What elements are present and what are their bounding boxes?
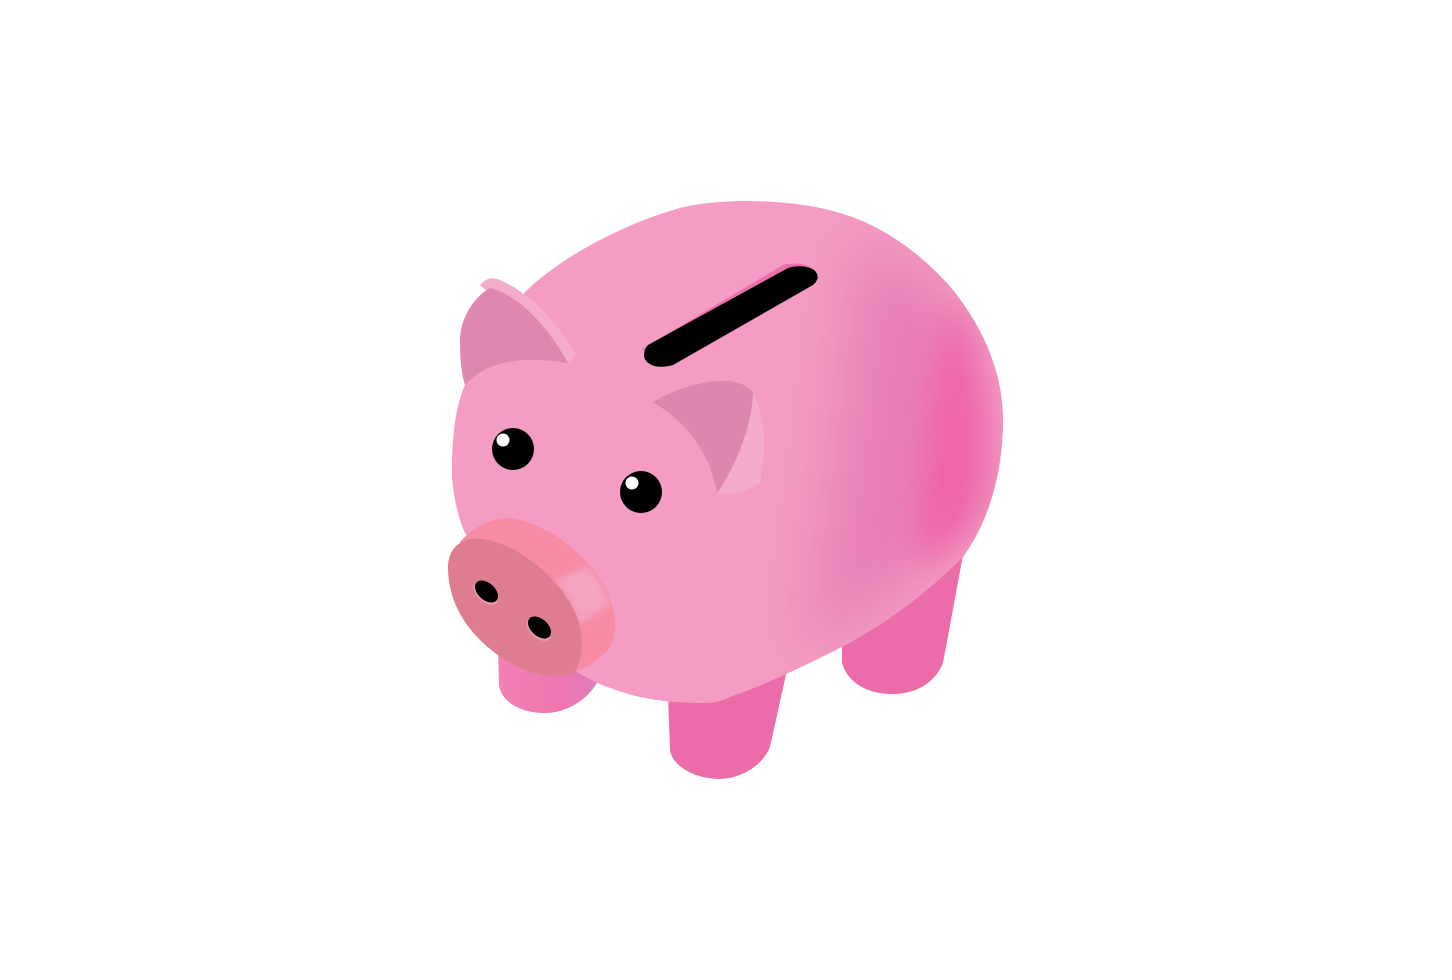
snout [448, 518, 615, 676]
pig body [440, 190, 1020, 710]
ear: left [460, 278, 576, 385]
snout rim highlight [556, 566, 610, 624]
head front [452, 360, 620, 500]
snout rim [460, 518, 615, 672]
snout face [448, 539, 582, 676]
coin slot [642, 264, 818, 367]
eye: right [620, 471, 662, 513]
leg: back right [842, 555, 963, 694]
leg: front [668, 670, 787, 779]
nostril: right [522, 612, 556, 645]
illustration: pink piggy bank [448, 201, 1003, 779]
leg: back left [498, 650, 600, 713]
nostril: left [469, 576, 503, 609]
ear: right [653, 381, 764, 494]
eye: left [492, 428, 534, 470]
